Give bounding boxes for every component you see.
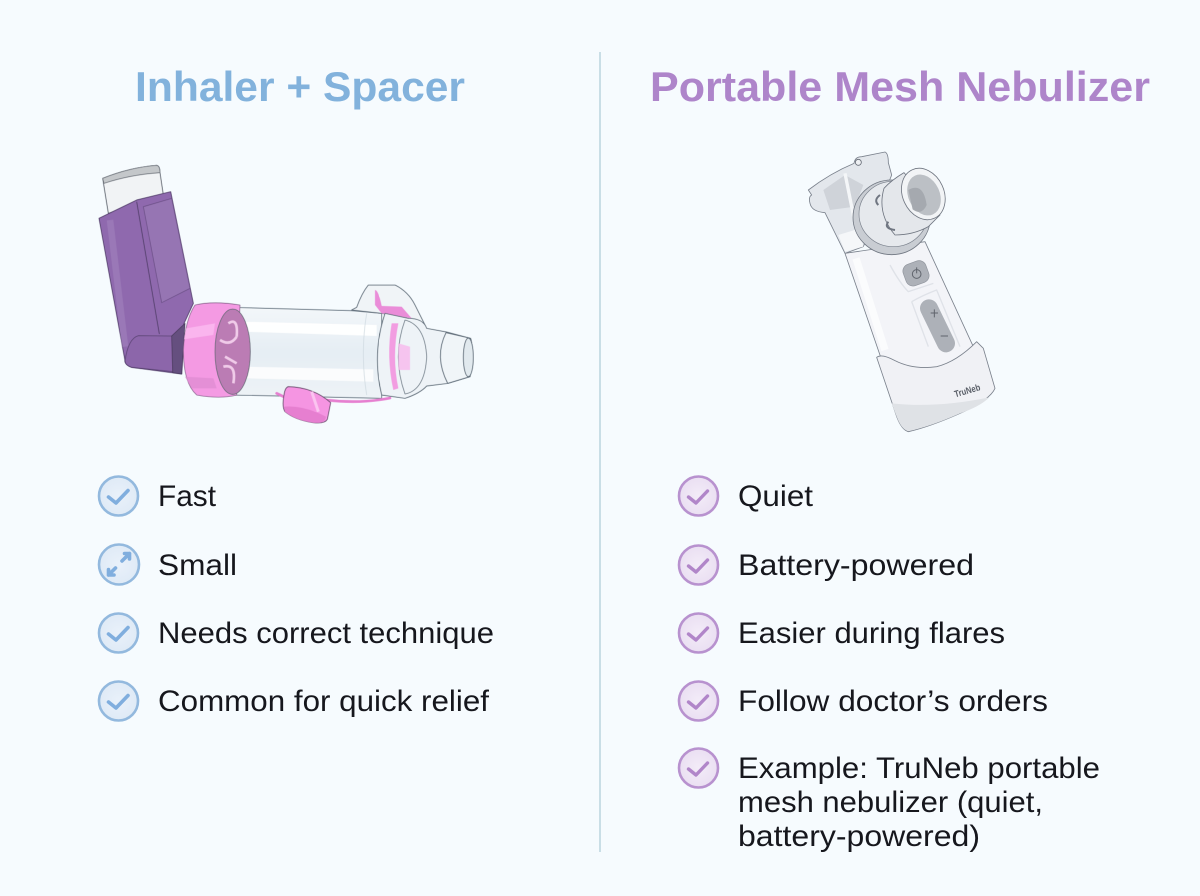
illustration: inhaler with spacer (99, 165, 473, 423)
power button (901, 259, 931, 288)
panel: portable mesh nebulizer (650, 63, 1150, 853)
item: Easier during flares: Easier during flares (738, 617, 1005, 650)
pink valve ring (183, 303, 250, 397)
item: Fast: Fast (158, 480, 217, 513)
pink cap and strap (277, 387, 390, 423)
item: Quiet: Quiet (738, 480, 814, 513)
item: Common for quick relief (99, 682, 490, 720)
heading: Portable Mesh Nebulizer: Portable Mesh Nebulizer (650, 63, 1150, 110)
base with brand: TruNeb (953, 382, 982, 399)
item: Quiet (679, 476, 814, 516)
item: Small: Small (158, 549, 237, 582)
item: Fast (99, 476, 217, 516)
item: Needs correct technique (99, 614, 494, 652)
item: TruNeb example: Example: TruNeb portable (738, 752, 1100, 785)
item: TruNeb example (679, 748, 1100, 853)
panel: inhaler + spacer (99, 63, 494, 720)
item: TruNeb example: battery-powered) (738, 820, 980, 853)
benefit list: inhaler (99, 476, 494, 720)
mouthpiece (853, 161, 953, 255)
base with brand (877, 342, 995, 432)
illustration: mesh nebulizer (808, 152, 995, 432)
volume control (929, 308, 948, 343)
flap and mouthpiece (352, 285, 473, 398)
item: Common for quick relief: Common for quick relief (158, 685, 490, 718)
item: Small (99, 544, 237, 584)
benefit list: nebulizer (679, 476, 1100, 853)
handle (845, 242, 973, 393)
item: Battery-powered (679, 546, 974, 584)
item: Easier during flares (679, 614, 1005, 652)
inhaler body (99, 192, 193, 374)
item: Needs correct technique: Needs correct technique (158, 617, 494, 650)
canister (103, 165, 163, 213)
medicine cup (808, 152, 892, 253)
item: Follow doctor's orders: Follow doctor’s orders (738, 685, 1048, 718)
heading: Inhaler + Spacer: Inhaler + Spacer (135, 63, 465, 110)
item: TruNeb example: mesh nebulizer (quiet, (738, 786, 1043, 819)
spacer chamber (230, 307, 382, 398)
item: Follow doctor's orders (679, 682, 1048, 720)
item: Battery-powered: Battery-powered (738, 549, 974, 582)
